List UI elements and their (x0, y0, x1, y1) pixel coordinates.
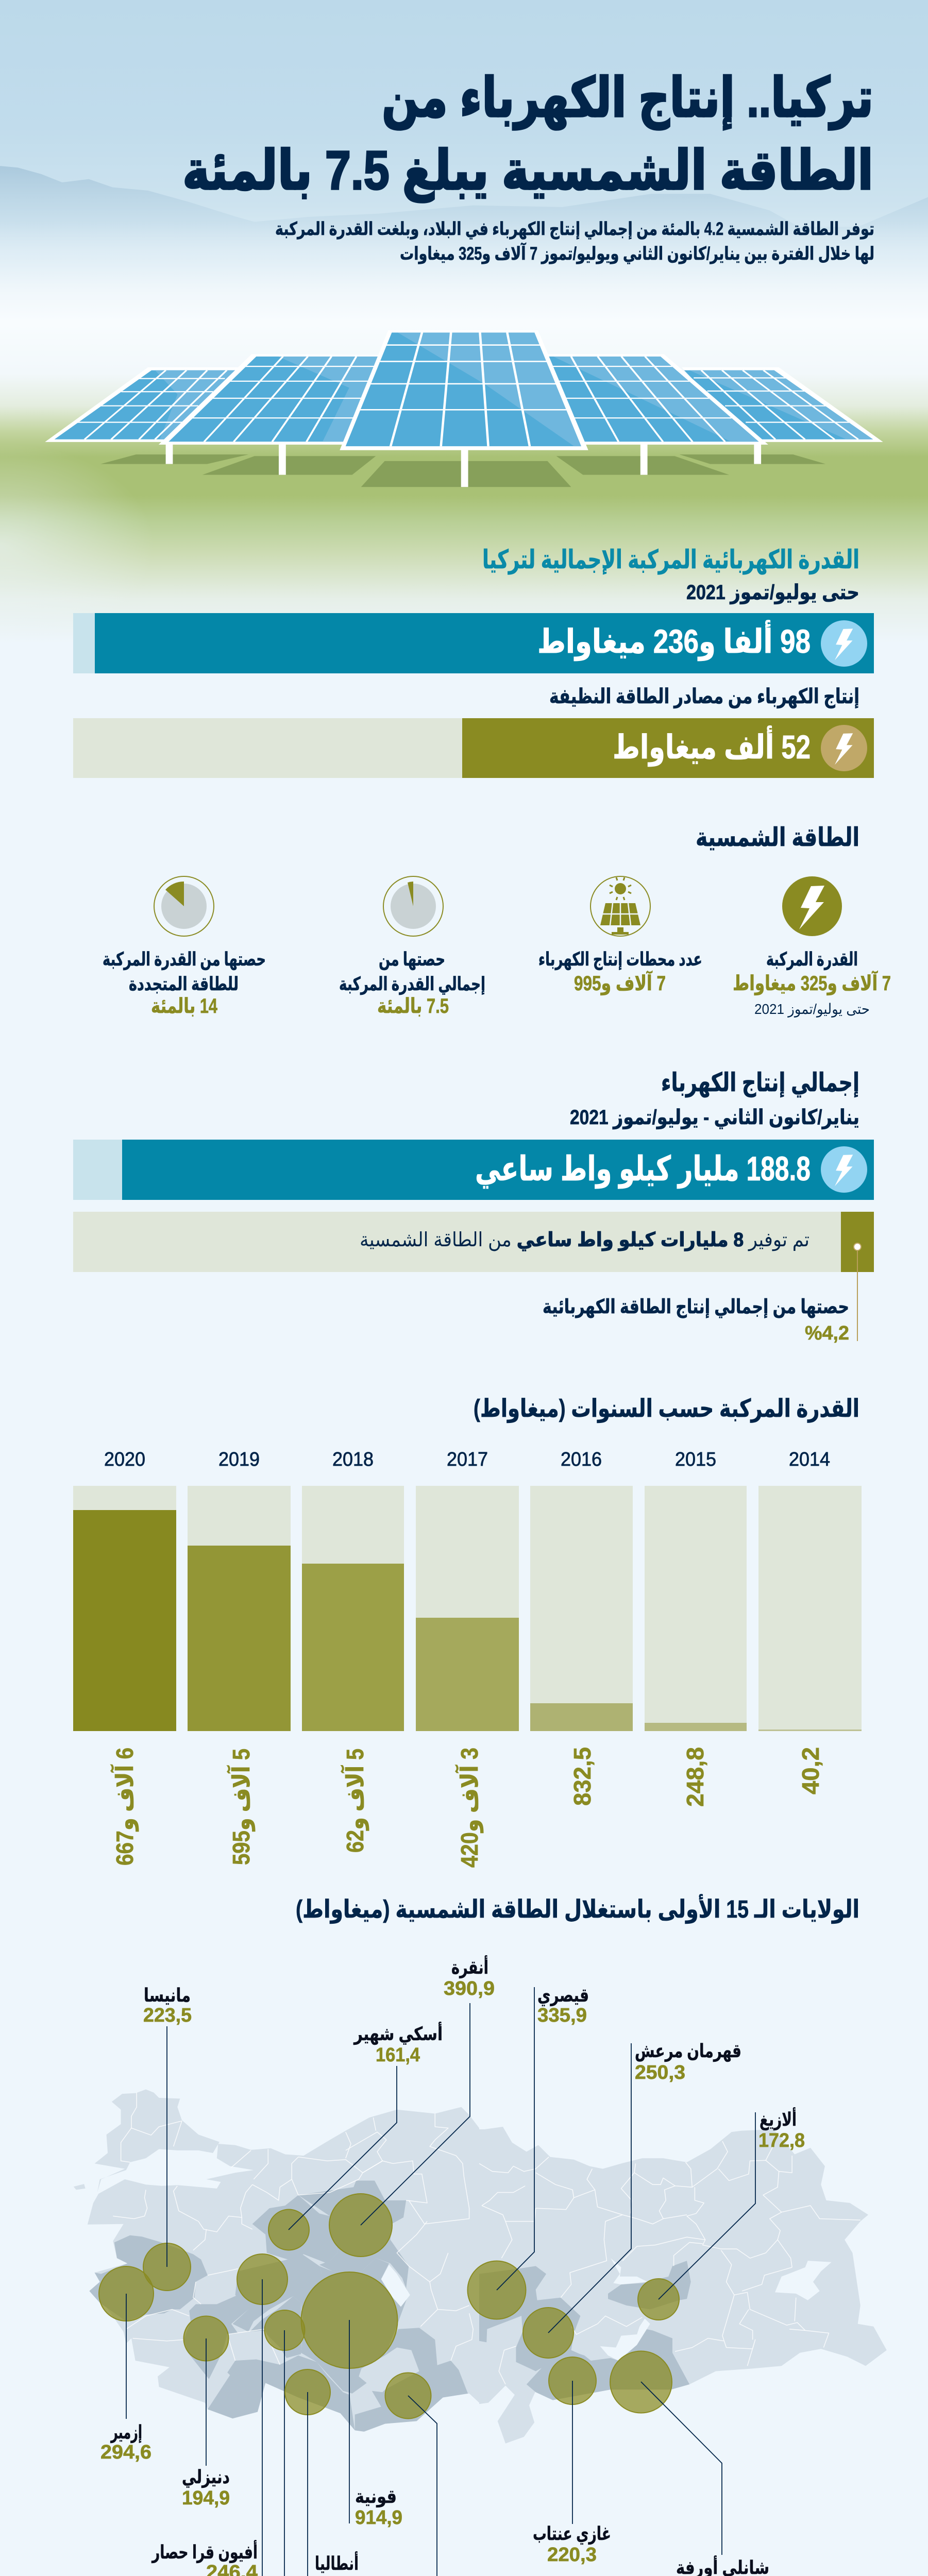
value: total capacity: 98 ألفا و236 ميغاواط (537, 620, 811, 661)
panel: solar production (73, 1212, 874, 1272)
province: Antalya: أنطاليا (315, 2551, 359, 2574)
province: Gaziantep (533, 2357, 611, 2566)
province: Ankara (329, 1955, 495, 2257)
stat: share of renewable capacity: للطاقة المتجددة (129, 973, 239, 994)
province: Afyon (151, 2254, 288, 2576)
province: Kahramanmaras (523, 2040, 741, 2358)
intro text: توفر الطاقة الشمسية 4.2 بالمئة من إجمالي إنتاج الكهرباء في البلاد، وبلغت القدرة المركبة (275, 219, 874, 240)
stat: share of total capacity: حصتها من (379, 948, 445, 970)
title (182, 67, 873, 202)
icon: solar panel and sun (590, 876, 650, 936)
province: Elazig: 172,8 (758, 2130, 805, 2151)
province: Kahramanmaras: 250,3 (635, 2062, 685, 2083)
province: Konya (301, 2272, 402, 2529)
year 2014: 40,2 (797, 1747, 824, 1794)
callout: share of production: %4,2 (805, 1323, 849, 1344)
province: Isparta (255, 2310, 314, 2576)
province: Eskisehir (268, 2022, 443, 2250)
year 2017: 2017 (447, 1449, 488, 1470)
year 2014 (758, 1449, 862, 1794)
year 2016: 832,5 (569, 1747, 596, 1806)
province: Kayseri: 335,9 (537, 2005, 587, 2026)
left haze (0, 443, 155, 649)
sky and grass backdrop (0, 0, 928, 644)
year 2017: 3 آلاف و420 (455, 1748, 483, 1868)
second right panel (543, 354, 768, 445)
year 2018: 5 آلاف و62 (341, 1749, 369, 1853)
province: Manisa: 223,5 (143, 2005, 192, 2026)
heading: solar energy: الطاقة الشمسية (696, 823, 859, 852)
year 2018: 2018 (332, 1449, 374, 1470)
year 2017 (416, 1449, 519, 1868)
lakes: Van, Keban, Ataturk (600, 2258, 832, 2361)
year 2015: 248,8 (682, 1747, 708, 1807)
province: Antalya (285, 2369, 359, 2576)
icon: lightning in circle (821, 1146, 867, 1193)
bar chart: capacity by year (73, 1449, 862, 1868)
stat: installed capacity: حتى يوليو/تموز 2021 (754, 1001, 870, 1018)
panel legs (166, 442, 761, 487)
year 2020: 6 آلاف و667 (110, 1748, 139, 1866)
far left panel (45, 367, 244, 442)
year 2015 (645, 1449, 747, 1807)
province: Kahramanmaras: قهرمان مرعش (635, 2040, 741, 2062)
illustration: solar panels (45, 330, 883, 487)
stat: installed capacity: القدرة المركبة (766, 948, 858, 970)
year 2016: 2016 (561, 1449, 602, 1470)
value: total production: 188.8 مليار كيلو واط ساعي (475, 1149, 811, 1189)
year 2019: 5 آلاف و595 (227, 1749, 255, 1865)
province: Denizli: 194,9 (182, 2487, 230, 2509)
intro text (275, 219, 874, 264)
bar: total capacity (73, 613, 874, 673)
bar: total production (73, 1140, 874, 1200)
heading: total electricity production: إجمالي إنتاج الكهرباء (661, 1068, 859, 1098)
year 2020: 2020 (104, 1449, 145, 1470)
mountains (0, 166, 928, 263)
year 2019 (188, 1449, 291, 1865)
stat: share of total capacity (339, 876, 485, 1018)
province: Eskisehir: 161,4 (376, 2044, 420, 2066)
icon: lightning in tan circle (821, 725, 867, 771)
province: Izmir (99, 2266, 154, 2463)
province: Elazig (638, 2107, 805, 2320)
province: Afyon: أفيون قرا حصار (151, 2540, 258, 2563)
stat: number of plants: عدد محطات إنتاج الكهرباء (538, 948, 702, 970)
province: Ankara: أنقرة (451, 1955, 488, 1978)
map: Turkey west half (74, 2090, 479, 2432)
province: Gaziantep: غازي عنتاب (533, 2523, 611, 2545)
panel: solar production: تم توفير 8 مليارات كيلو واط ساعي من الطاقة الشمسية (360, 1229, 809, 1251)
province: Kayseri (468, 1985, 589, 2319)
stat: number of plants (538, 876, 702, 995)
icon: pie 7.5 percent (383, 876, 443, 936)
province: Izmir: إزمير (110, 2421, 142, 2443)
lake: Tuz (381, 2265, 410, 2307)
year 2015: 2015 (675, 1449, 716, 1470)
icon: pie 14 percent (154, 876, 214, 936)
province: Izmir: 294,6 (100, 2442, 151, 2463)
province: Konya: قونية (355, 2486, 397, 2507)
stat: share of renewable capacity: 14 بالمئة (151, 995, 218, 1018)
stat: share of total capacity: 7.5 بالمئة (377, 995, 449, 1018)
province: Sanliurfa (610, 2351, 769, 2576)
bar: clean energy (73, 718, 874, 778)
callout: share of production: حصتها من إجمالي إنتاج الطاقة الكهربائية (543, 1296, 849, 1318)
stat: installed capacity: 7 آلاف و325 ميغاواط (733, 970, 891, 995)
far right panel (682, 367, 883, 442)
subheading: until July 2021: حتى يوليو/تموز 2021 (686, 581, 859, 604)
province: Kayseri: قيصري (537, 1985, 589, 2006)
year 2019: 2019 (218, 1449, 260, 1470)
year 2020 (73, 1449, 176, 1866)
map: Turkey east half (479, 2127, 887, 2444)
province: Elazig: ألازيغ (760, 2107, 797, 2130)
center panel (340, 330, 588, 450)
province: Manisa (143, 1985, 192, 2291)
province: Konya: 914,9 (355, 2507, 402, 2529)
province: Ankara: 390,9 (444, 1978, 495, 1999)
year 2016 (530, 1449, 633, 1806)
subheading: period: يناير/كانون الثاني - يوليو/تموز 2021 (570, 1106, 859, 1129)
province: Denizli (182, 2316, 230, 2509)
stat: share of renewable capacity (103, 876, 266, 1018)
connector with dot (854, 1243, 861, 1341)
province: Manisa: مانيسا (144, 1985, 191, 2006)
second left panel (159, 354, 385, 445)
heading: top 15 provinces: الولايات الـ 15 الأولى باستغلال الطاقة الشمسية (ميغاواط) (296, 1894, 859, 1924)
stat: number of plants: 7 آلاف و995 (574, 970, 666, 995)
province: Mersin (385, 2373, 491, 2576)
ground shadows (100, 454, 825, 487)
province: Eskisehir: أسكي شهير (353, 2022, 443, 2045)
icon: lightning in circle (821, 620, 867, 667)
year 2014: 2014 (789, 1449, 830, 1470)
year 2018 (302, 1449, 404, 1853)
province: Gaziantep: 220,3 (547, 2544, 597, 2566)
callout: share of production (543, 1296, 849, 1344)
stat: installed capacity (733, 876, 891, 1018)
province: Denizli: دنيزلي (182, 2466, 230, 2488)
stat: share of renewable capacity: حصتها من القدرة المركبة (103, 948, 266, 970)
icon: bolt (782, 876, 842, 936)
value: clean energy: 52 ألف ميغاواط (613, 725, 811, 767)
stat: share of total capacity: إجمالي القدرة المركبة (339, 973, 485, 995)
